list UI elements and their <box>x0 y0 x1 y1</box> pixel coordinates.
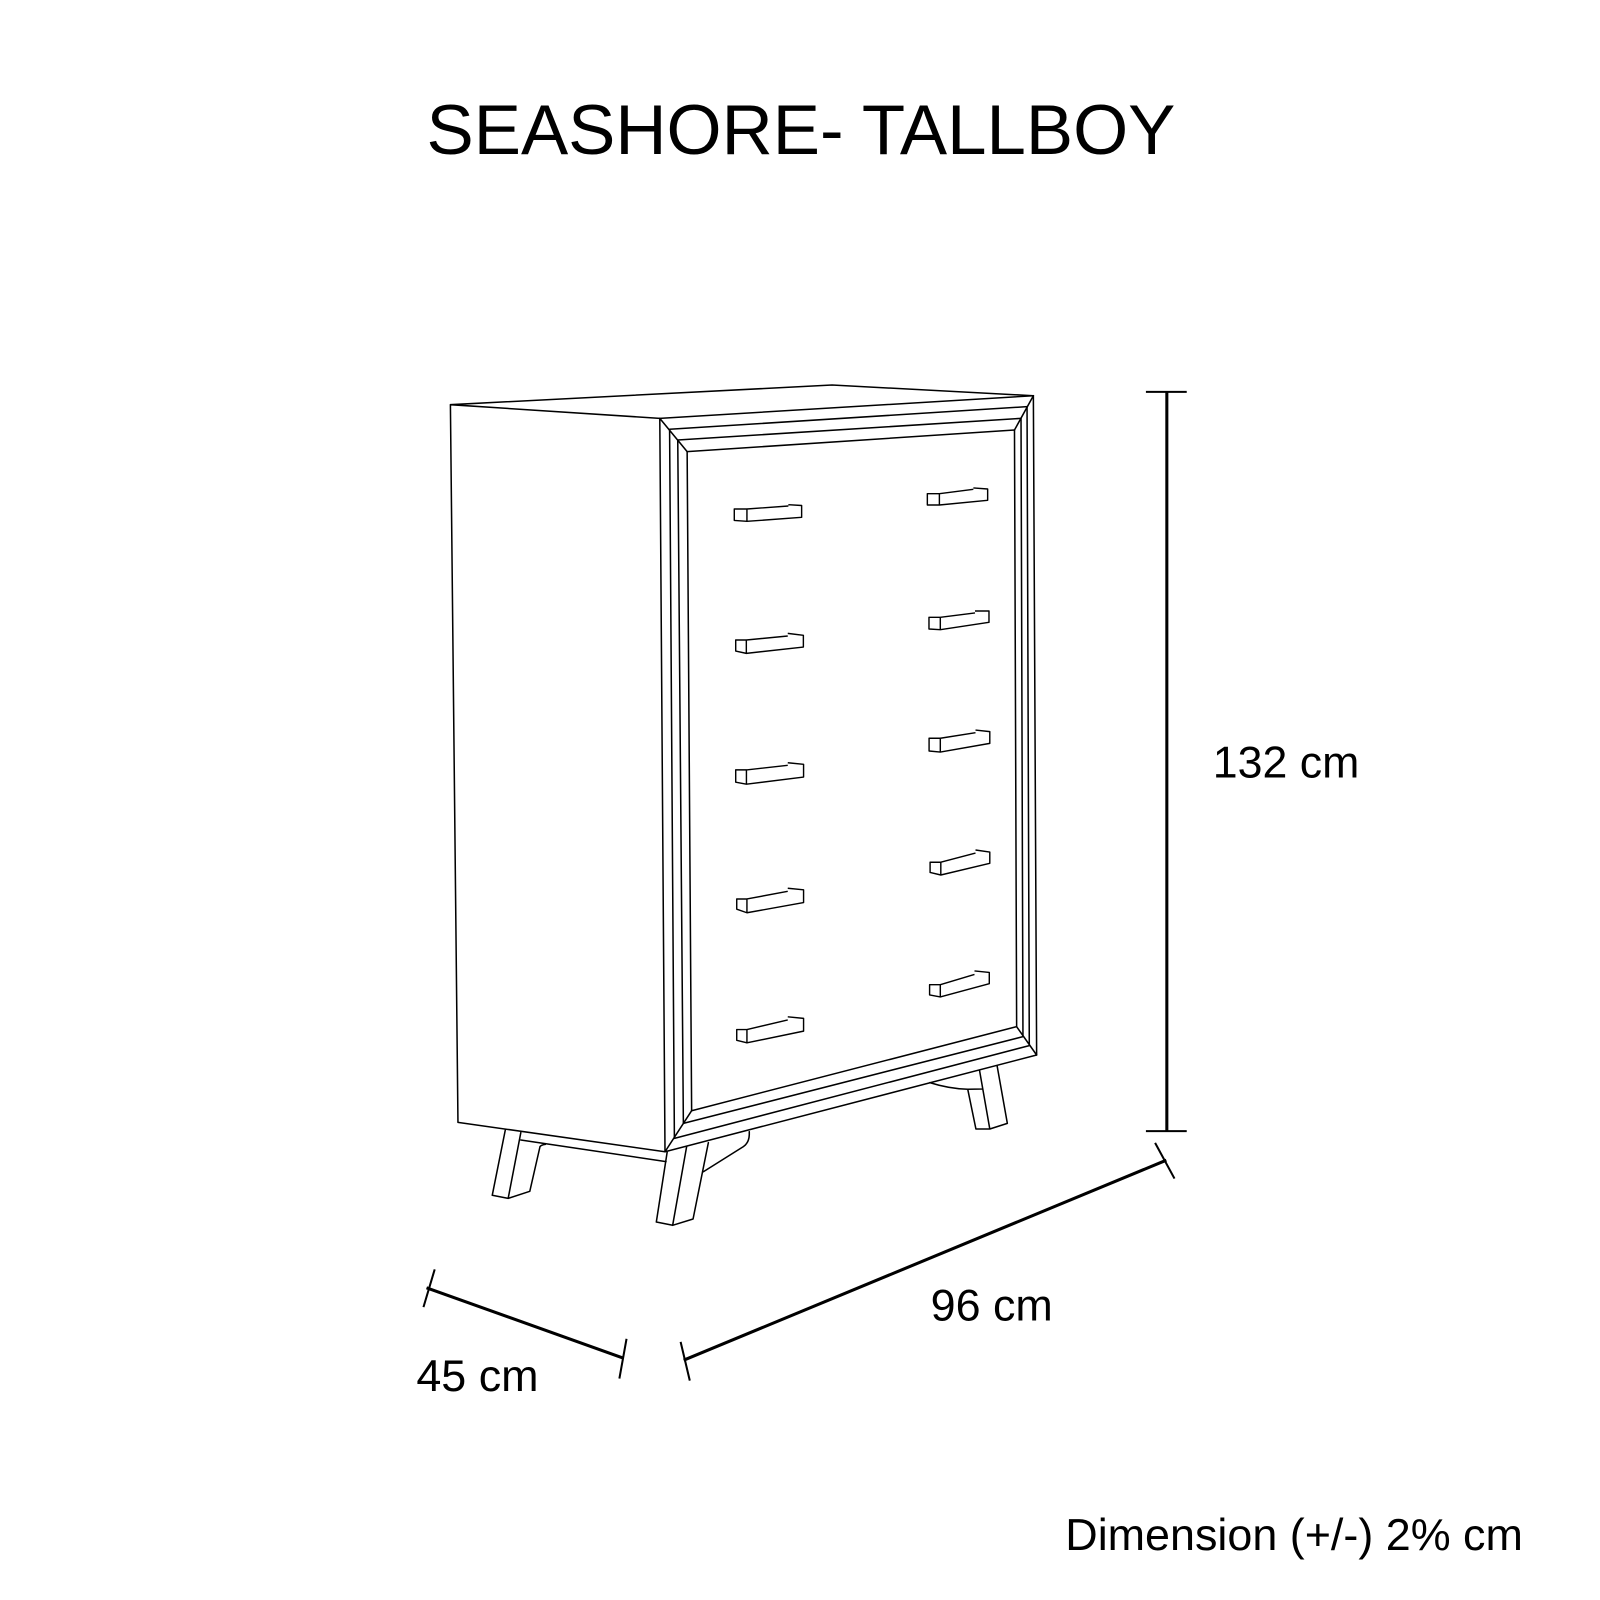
legs and stretcher <box>492 1066 1007 1225</box>
width dimension line <box>681 1143 1174 1381</box>
width label: 96 cm <box>931 1279 1053 1330</box>
drawer handles left column <box>734 505 804 1043</box>
depth dimension line <box>423 1269 627 1379</box>
cabinet top and side panel <box>450 385 1033 1152</box>
title: SEASHORE- TALLBOY <box>427 91 1175 170</box>
drawer handles right column <box>927 488 990 997</box>
tolerance note: Dimension (+/-) 2% cm <box>1065 1509 1523 1560</box>
tallboy line drawing <box>450 385 1037 1225</box>
height dimension line <box>1146 392 1187 1131</box>
height label: 132 cm <box>1213 739 1359 788</box>
front frame with mitred bevels <box>660 396 1037 1152</box>
depth label: 45 cm <box>416 1350 539 1401</box>
